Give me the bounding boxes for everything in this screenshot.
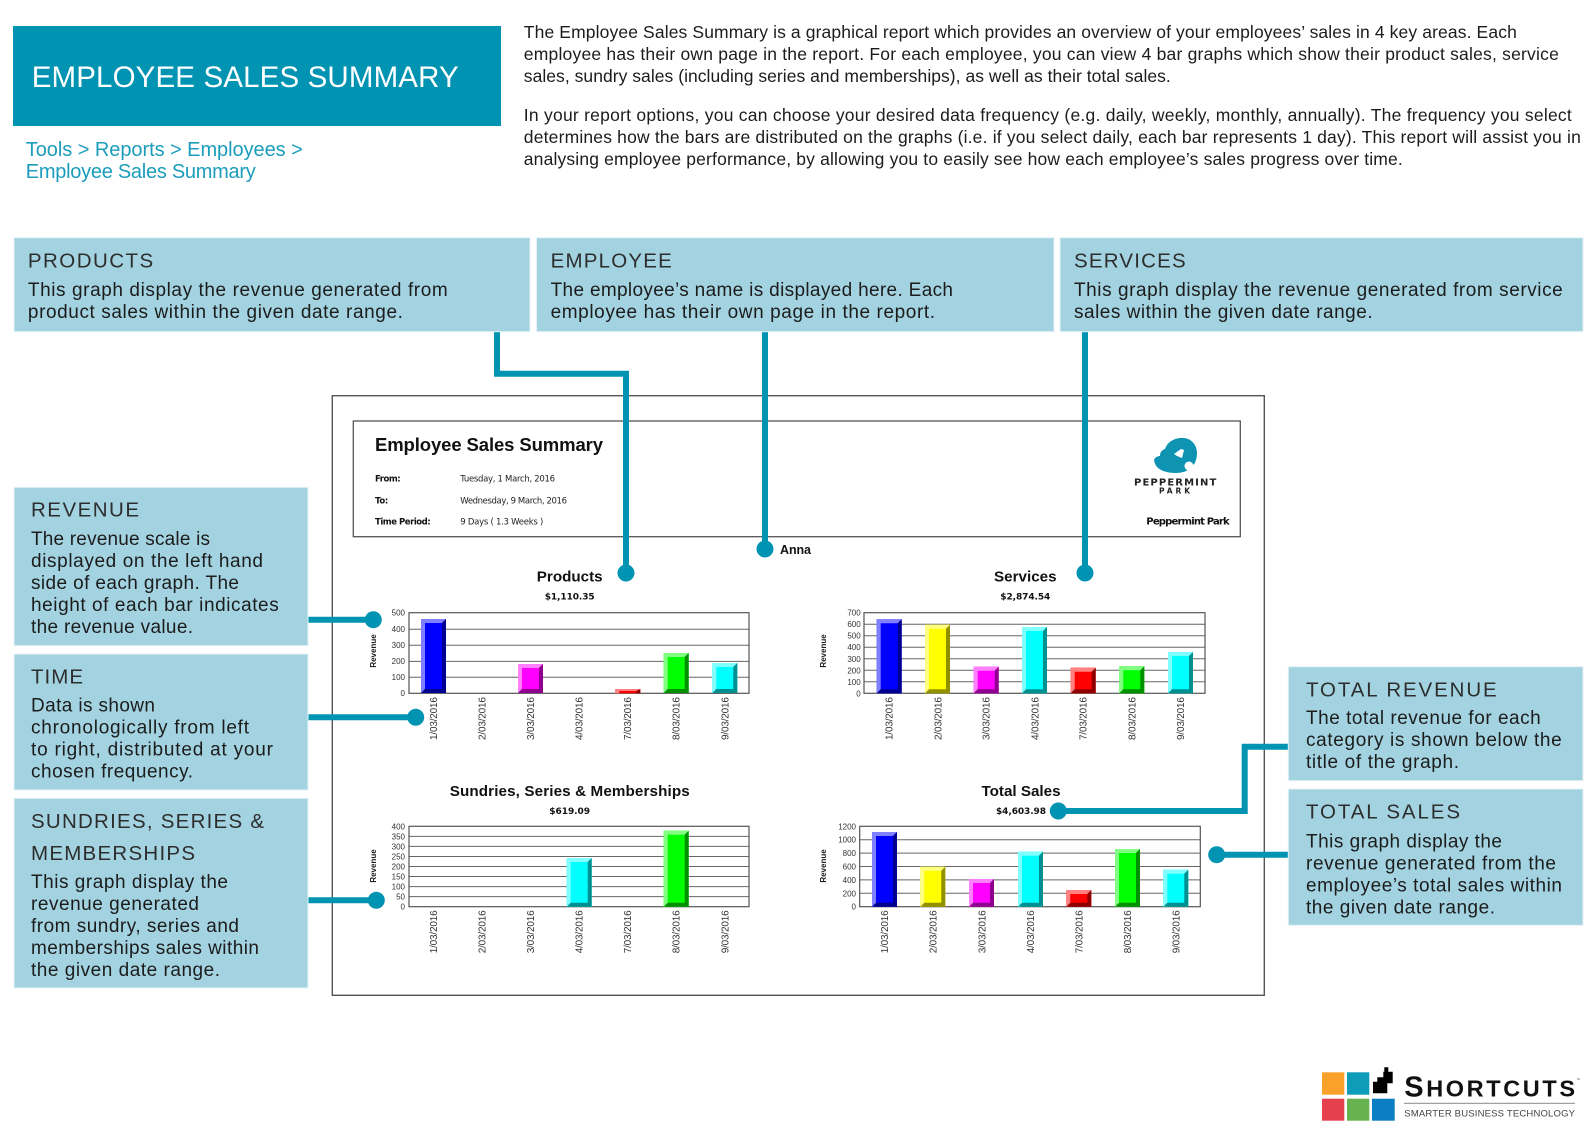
panel: total revenue: category is shown below the (1306, 730, 1562, 751)
chart: products: $1,110.35 (545, 592, 595, 602)
report header box: 9 Days ( 1.3 Weeks ) (460, 518, 543, 528)
panel: products (14, 238, 530, 332)
chart: total sales: Total Sales (981, 783, 1061, 800)
employee name: Anna (780, 543, 812, 557)
chart: sundries, series and memberships: 250 (392, 852, 406, 862)
intro text block: sales, sundry sales (including series and memberships), as well as their total sales. (524, 66, 1171, 86)
chart: products: 1/03/2016 (429, 697, 440, 740)
chart: total sales: 1200 (838, 822, 857, 831)
panel: time: TIME (31, 666, 83, 689)
icon: peppermint park logo (1134, 438, 1216, 496)
chart: sundries, series and memberships: 50 (396, 893, 406, 902)
panel: products: This graph display the revenue generated from (28, 280, 448, 301)
panel: total sales: This graph display the (1306, 831, 1502, 852)
panel: total revenue: title of the graph. (1306, 752, 1459, 773)
panel: employee: The employee’s name is displayed here. Each (551, 280, 953, 301)
chart: sundries, series and memberships: 0 (401, 903, 406, 912)
panel: time: chosen frequency. (31, 761, 193, 782)
panel: total revenue: The total revenue for each (1306, 708, 1541, 729)
chart: sundries, series and memberships: 8/03/2016 (672, 910, 683, 953)
panel: total revenue: TOTAL REVENUE (1306, 679, 1497, 702)
chart: total sales: 8/03/2016 (1123, 910, 1134, 953)
chart: total sales: 7/03/2016 (1074, 910, 1085, 953)
chart: services: 9/03/2016 (1176, 697, 1187, 740)
chart: sundries, series and memberships: Revenue (369, 849, 378, 883)
chart: services (819, 569, 1205, 740)
breadcrumb navigation path: Employee Sales Summary (26, 161, 256, 183)
panel: revenue (14, 487, 308, 646)
icon: shortcuts logo (1322, 1067, 1580, 1121)
panel: sundries, series and memberships: MEMBERSHIPS (31, 842, 195, 865)
chart: services: $2,874.54 (1000, 592, 1050, 602)
chart: products: 3/03/2016 (526, 697, 537, 740)
chart: services: 3/03/2016 (982, 697, 993, 740)
title banner (13, 26, 501, 126)
report header box: Peppermint Park (1146, 517, 1230, 528)
panel: total sales: revenue generated from the (1306, 853, 1556, 874)
intro text block (524, 22, 1581, 169)
chart: sundries, series and memberships: 4/03/2016 (575, 910, 586, 953)
panel: sundries, series and memberships: from sundry, series and (31, 916, 239, 937)
chart: total sales: Revenue (819, 849, 828, 883)
report header box: Employee Sales Summary (375, 434, 604, 455)
intro text block: The Employee Sales Summary is a graphical report which provides an overview of your employees’ sales in 4 key areas. Each (524, 22, 1517, 42)
chart: total sales: 400 (843, 876, 857, 885)
chart: total sales: 1/03/2016 (880, 910, 891, 953)
breadcrumb navigation path (26, 139, 303, 183)
panel: total sales: TOTAL SALES (1306, 801, 1460, 824)
chart: services: 4/03/2016 (1031, 697, 1042, 740)
chart: services: 7/03/2016 (1079, 697, 1090, 740)
chart: total sales: 3/03/2016 (977, 910, 988, 953)
panel: total revenue (1288, 667, 1583, 781)
panel: sundries, series and memberships: revenue generated (31, 894, 199, 915)
report header box: Time Period: (375, 518, 431, 528)
chart: services: 600 (847, 620, 861, 629)
panel: sundries, series and memberships: SUNDRIES, SERIES & (31, 810, 264, 833)
arrow: employee connector (756, 332, 774, 558)
chart: products: 8/03/2016 (672, 697, 683, 740)
chart: services: 0 (856, 689, 861, 698)
chart: total sales: 2/03/2016 (929, 910, 940, 953)
panel: employee (536, 238, 1054, 332)
panel: products: product sales within the given date range. (28, 302, 403, 323)
icon: peppermint park logo: PARK (1159, 486, 1191, 496)
chart: total sales (819, 783, 1200, 953)
chart: products: Products (537, 569, 603, 586)
chart: total sales: 0 (852, 903, 857, 912)
chart: sundries, series and memberships: 7/03/2016 (623, 910, 634, 953)
chart: sundries, series and memberships: 100 (392, 883, 406, 892)
panel: sundries, series and memberships: memberships sales within (31, 938, 259, 959)
arrow: services connector (1076, 332, 1094, 582)
report header box (353, 421, 1240, 537)
chart: products: 4/03/2016 (575, 697, 586, 740)
chart: products: 0 (401, 689, 406, 698)
chart: total sales: $4,603.98 (996, 807, 1046, 817)
panel: services (1060, 238, 1583, 332)
panel: revenue: the revenue value. (31, 617, 193, 638)
panel: sundries, series and memberships (14, 798, 308, 988)
panel: services: SERVICES (1074, 250, 1186, 273)
report header box: Wednesday, 9 March, 2016 (460, 496, 567, 506)
icon: shortcuts logo: SMARTER BUSINESS TECHNOLOGY (1404, 1109, 1576, 1120)
arrow: revenue connector (308, 611, 382, 628)
chart: products (369, 569, 749, 740)
panel: services: sales within the given date range. (1074, 302, 1373, 323)
report frame (332, 396, 1264, 995)
panel: time: Data is shown (31, 695, 155, 716)
chart: services: 200 (847, 666, 861, 675)
chart: sundries, series and memberships (369, 783, 749, 953)
chart: services: 8/03/2016 (1127, 697, 1138, 740)
intro text block: analysing employee performance, by allowing you to easily see how each employee’s sales progress over time. (524, 149, 1403, 169)
chart: total sales: 200 (843, 889, 857, 898)
intro text block: determines how the bars are distributed on the graphs (i.e. if you select daily, each bar represents 1 day). This report will assist you in (524, 127, 1581, 147)
chart: sundries, series and memberships: 150 (392, 872, 406, 882)
chart: total sales: 4/03/2016 (1026, 910, 1037, 953)
report header box: From: (375, 475, 401, 485)
chart: products: 300 (392, 641, 406, 650)
chart: sundries, series and memberships: $619.09 (549, 807, 590, 817)
chart: sundries, series and memberships: Sundries, Series & Memberships (450, 783, 690, 800)
chart: products: 400 (392, 625, 406, 634)
report header box: Tuesday, 1 March, 2016 (459, 475, 555, 485)
chart: services: 400 (847, 643, 861, 652)
chart: sundries, series and memberships: 2/03/2016 (478, 910, 489, 953)
chart: products: 100 (392, 673, 406, 682)
title banner: EMPLOYEE SALES SUMMARY (32, 61, 459, 94)
arrow: sundries connector (308, 892, 385, 909)
chart: services: 2/03/2016 (933, 697, 944, 740)
panel: time (14, 654, 308, 790)
panel: sundries, series and memberships: This graph display the (31, 872, 228, 893)
panel: employee: EMPLOYEE (551, 250, 672, 273)
panel: employee: employee has their own page in the report. (551, 302, 935, 323)
chart: products: Revenue (369, 634, 378, 668)
icon: shortcuts logo: ™ (1576, 1077, 1580, 1082)
chart: sundries, series and memberships: 3/03/2016 (526, 910, 537, 953)
chart: services: 700 (847, 609, 861, 618)
chart: products: 7/03/2016 (623, 697, 634, 740)
panel: revenue: REVENUE (31, 499, 139, 522)
panel: revenue: The revenue scale is (31, 529, 210, 550)
breadcrumb navigation path: Tools > Reports > Employees > (26, 139, 303, 161)
chart: sundries, series and memberships: 9/03/2016 (720, 910, 731, 953)
chart: sundries, series and memberships: 350 (392, 832, 406, 841)
chart: total sales: 600 (843, 862, 857, 872)
intro text block: In your report options, you can choose your desired data frequency (e.g. daily, weekly, monthly, annually). The frequency you select (524, 105, 1572, 125)
chart: services: 300 (847, 655, 861, 664)
arrow: total sales connector (1208, 846, 1288, 863)
chart: total sales: 1000 (838, 836, 857, 845)
panel: total sales: employee’s total sales within (1306, 875, 1562, 896)
chart: products: 500 (392, 609, 406, 618)
chart: sundries, series and memberships: 200 (392, 862, 406, 872)
chart: services: Services (994, 569, 1057, 586)
chart: services: 500 (847, 632, 861, 641)
panel: total sales: the given date range. (1306, 897, 1495, 918)
icon: shortcuts logo: SHORTCUTS (1404, 1072, 1575, 1104)
arrow: total revenue connector (1050, 747, 1288, 820)
chart: products: 2/03/2016 (478, 697, 489, 740)
arrow: products connector (497, 332, 634, 582)
chart: services: 1/03/2016 (885, 697, 896, 740)
panel: services: This graph display the revenue generated from service (1074, 280, 1563, 301)
panel: revenue: height of each bar indicates (31, 595, 279, 616)
panel: time: chronologically from left (31, 717, 250, 738)
panel: sundries, series and memberships: the given date range. (31, 960, 220, 981)
panel: revenue: side of each graph. The (31, 573, 239, 594)
chart: total sales: 9/03/2016 (1172, 910, 1183, 953)
chart: services: 100 (847, 678, 861, 687)
chart: sundries, series and memberships: 1/03/2016 (429, 910, 440, 953)
chart: services: Revenue (819, 634, 828, 668)
panel: revenue: displayed on the left hand (31, 551, 263, 572)
chart: products: 9/03/2016 (720, 697, 731, 740)
report header box: To: (375, 496, 388, 506)
panel: total sales (1288, 789, 1583, 925)
icon: peppermint park logo: PEPPERMINT (1134, 478, 1216, 489)
chart: sundries, series and memberships: 400 (392, 822, 406, 831)
panel: products: PRODUCTS (28, 250, 153, 273)
chart: sundries, series and memberships: 300 (392, 842, 406, 851)
intro text block: employee has their own page in the report. For each employee, you can view 4 bar graphs which show their product sales, service (524, 44, 1559, 64)
chart: total sales: 800 (843, 849, 857, 858)
arrow: time connector (308, 709, 424, 726)
chart: products: 200 (392, 657, 406, 666)
panel: time: to right, distributed at your (31, 739, 274, 760)
